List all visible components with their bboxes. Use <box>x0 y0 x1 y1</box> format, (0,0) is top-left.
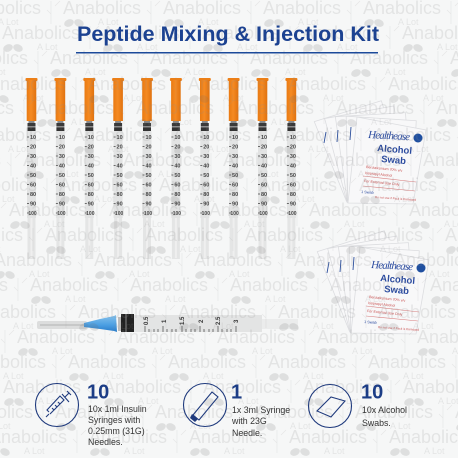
count: 10 <box>87 382 109 404</box>
syringe 4 <box>112 78 124 259</box>
alcohol swab packets, lower stack: Swab <box>384 284 410 297</box>
3ml syringe with 23G needle: 0.5 <box>144 316 150 325</box>
description: 1x 3ml Syringe <box>232 405 290 415</box>
description: Needle. <box>232 428 262 438</box>
3ml syringe with 23G needle: 1 <box>162 319 168 323</box>
alcohol swab packets, upper stack: Isopropyl Alcohol <box>365 171 393 178</box>
3ml syringe with 23G needle <box>37 314 298 332</box>
alcohol swab packets, upper stack: Healthease <box>367 129 411 143</box>
count: 1 <box>231 382 242 404</box>
icon: swab wipe <box>308 384 352 428</box>
feature: 10 insulin syringes <box>36 382 149 447</box>
syringe 1 <box>26 78 38 259</box>
description: Swabs. <box>362 418 391 428</box>
count: 10 <box>361 382 383 404</box>
syringe 9 <box>256 78 268 259</box>
description: with 23G <box>231 416 267 426</box>
icon: 3ml syringe <box>184 384 226 426</box>
alcohol swab packets, lower stack: For External Use Only <box>367 309 403 317</box>
description: Needles. <box>88 437 123 447</box>
row of ten 1ml insulin syringes <box>26 78 297 259</box>
alcohol swab packets, upper stack: 1 Swab <box>361 190 374 195</box>
description: Syringes with <box>88 415 140 425</box>
alcohol swab packets, upper stack: Swab <box>381 154 407 167</box>
3ml syringe with 23G needle: 1.5 <box>180 316 186 325</box>
alcohol swab packets, lower stack: Do not use if Pack is Damaged <box>378 325 420 332</box>
syringe 5 <box>141 78 153 259</box>
description: 10x 1ml Insulin <box>88 404 147 414</box>
description: 0.25mm (31G) <box>88 426 145 436</box>
feature: 10 alcohol swabs <box>308 382 409 428</box>
3ml syringe with 23G needle: 3 <box>234 319 240 323</box>
alcohol swab packets, upper stack: Alcohol <box>377 143 412 157</box>
title: Peptide Mixing & Injection Kit <box>77 23 379 46</box>
3ml syringe with 23G needle: 2 <box>199 319 205 323</box>
syringe 6 <box>170 78 182 259</box>
icon: insulin syringe <box>36 384 78 426</box>
syringe 7 <box>199 78 211 259</box>
syringe 2 <box>54 78 66 259</box>
alcohol swab packets, lower stack: Benzalkonium 70% v/v <box>369 295 406 303</box>
description: 10x Alcohol <box>362 405 407 415</box>
alcohol swab packets, lower stack: Alcohol <box>380 273 415 287</box>
alcohol swab packets, lower stack <box>309 219 429 334</box>
3ml syringe with 23G needle: 2.5 <box>216 316 222 325</box>
alcohol swab packets, lower stack: Healthease <box>370 259 414 273</box>
alcohol swab packets, upper stack: Do not use if Pack is Damaged <box>375 195 417 202</box>
alcohol swab packets, upper stack: For External Use Only <box>364 179 400 187</box>
alcohol swab packets, lower stack: 1 Swab <box>364 320 377 325</box>
alcohol swab packets, lower stack: Isopropyl Alcohol <box>368 301 396 308</box>
feature: 1 3ml syringe <box>184 382 293 438</box>
syringe 3 <box>83 78 95 259</box>
alcohol swab packets, upper stack <box>306 89 426 204</box>
syringe 10 <box>285 78 297 259</box>
alcohol swab packets, upper stack: Benzalkonium 70% v/v <box>366 165 403 173</box>
syringe 8 <box>228 78 240 259</box>
